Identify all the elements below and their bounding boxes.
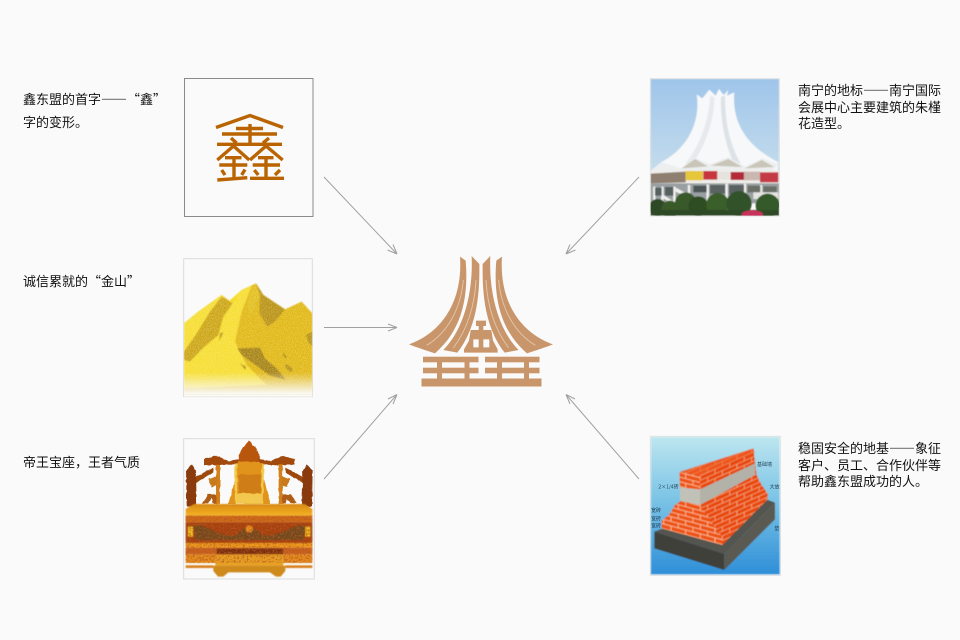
panel: brick foundation card <box>650 436 780 575</box>
diagram annotations: 宽砖 <box>651 522 661 529</box>
panel: xin character card <box>184 78 313 216</box>
diagram annotations: 宽砖 <box>651 516 661 523</box>
image: Nanning convention centre <box>649 79 780 218</box>
caption: Nanning landmark: 南宁的地标——南宁国际 <box>798 80 941 99</box>
image: imperial throne <box>186 441 313 507</box>
caption: throne: 帝王宝座，王者气质 <box>23 452 140 471</box>
caption: Nanning landmark: 会展中心主要建筑的朱槿 <box>798 96 941 116</box>
diagram annotations <box>651 461 780 532</box>
diagram annotations: 宽砖 <box>651 507 661 514</box>
caption: foundation <box>798 438 941 490</box>
logo: roof and tower <box>409 256 553 353</box>
arrow: throne to logo <box>324 394 397 479</box>
arrow: xin character to logo <box>324 177 397 254</box>
arrow: convention centre to logo <box>566 177 639 254</box>
panel: throne card <box>184 439 314 579</box>
throne carving texture <box>186 516 312 563</box>
diagram annotations: 垫 <box>774 525 779 532</box>
caption: foundation: 帮助鑫东盟成功的人。 <box>798 471 928 490</box>
panel: convention centre photo card <box>649 79 780 218</box>
image: brick foundation diagram <box>651 437 780 574</box>
caption: Nanning landmark: 花造型。 <box>798 113 850 132</box>
logo: base characters <box>422 357 542 386</box>
diagram annotations: 大放 <box>770 484 780 491</box>
caption: foundation: 客户、员工、合作伙伴等 <box>798 454 941 474</box>
arrow: mountain to logo <box>324 324 397 331</box>
logo: Xin Dongmeng emblem <box>409 256 553 386</box>
arrow: foundation to logo <box>566 394 639 479</box>
panel: gold mountain card <box>184 259 312 397</box>
image: gold mountain <box>184 283 312 397</box>
diagram annotations: 2×1/4砖 <box>658 484 679 491</box>
caption: Nanning landmark <box>798 80 941 132</box>
caption: foundation: 稳固安全的地基——象征 <box>798 438 941 457</box>
caption: xin character: 鑫东盟的首字——“鑫” <box>23 89 166 108</box>
caption: xin character <box>23 89 166 131</box>
icon: stylised xin character <box>216 116 284 180</box>
diagram annotations: 基础墙 <box>757 461 772 468</box>
caption: xin character: 字的变形。 <box>23 112 88 131</box>
caption: gold mountain: 诚信累就的“金山” <box>23 271 140 290</box>
